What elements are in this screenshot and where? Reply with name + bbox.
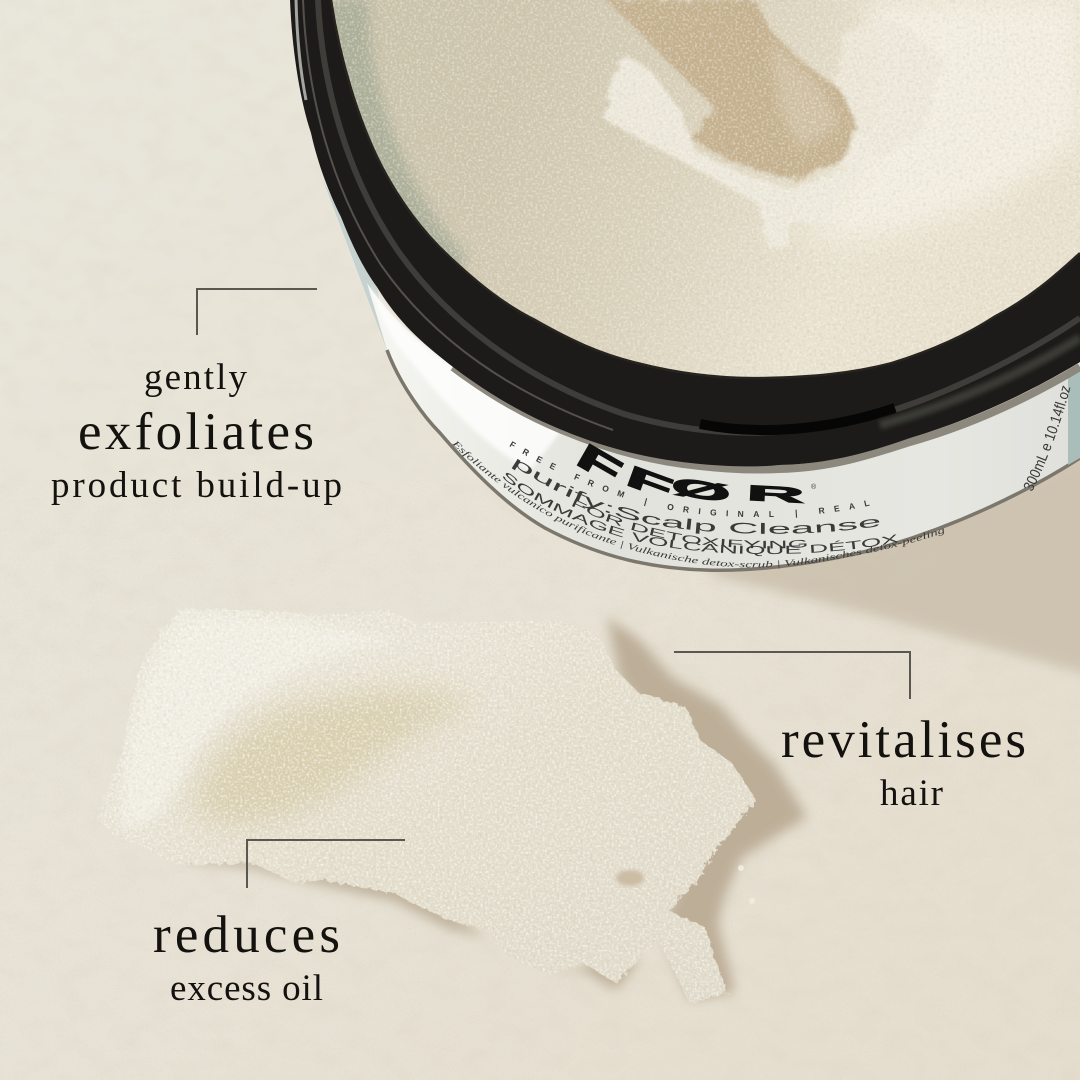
label text bbox=[452, 386, 1070, 569]
inner rim line bbox=[331, 0, 1080, 378]
caption text: reduces bbox=[153, 906, 340, 964]
jar label bbox=[367, 283, 1080, 570]
upper right crystals bbox=[834, 27, 868, 124]
tan crater bbox=[606, 0, 857, 180]
callout: exfoliates bbox=[51, 289, 342, 506]
jar body teal side bbox=[323, 180, 387, 350]
scrub smear bbox=[90, 600, 770, 1010]
descriptor English: FOR DETOXIFYING bbox=[572, 499, 807, 548]
caption text: exfoliates bbox=[78, 403, 314, 461]
jar right teal panel bbox=[1068, 367, 1080, 465]
brand logo: Ø bbox=[669, 471, 733, 509]
crater lighter lobe bbox=[771, 48, 838, 147]
callout: revitalises bbox=[674, 652, 1026, 814]
leader line bbox=[674, 652, 910, 699]
descriptor translations: Esfoliante vulcanico purificante | Vulkanische detox-scrub | Vulkanisches detox-peeling bbox=[452, 440, 944, 569]
left glass tint bbox=[325, 0, 470, 275]
jar bbox=[290, 0, 1080, 572]
callout: reduces bbox=[153, 840, 405, 1009]
smear pale ridge bbox=[122, 624, 368, 827]
product name: purify:Scalp Cleanse bbox=[512, 458, 880, 534]
volume: 300mL e 10.14fl.oz bbox=[1024, 386, 1070, 491]
caption text bbox=[781, 711, 1026, 814]
white crystal ridge bbox=[605, 55, 878, 248]
caption text bbox=[153, 906, 340, 1009]
jar cast shadow bbox=[700, 440, 1080, 678]
brand logo: R bbox=[746, 481, 805, 508]
caption text: revitalises bbox=[781, 711, 1026, 769]
smear cast shadow bbox=[178, 617, 807, 1000]
smear body bbox=[97, 610, 756, 1003]
black rim bbox=[290, 0, 1080, 466]
caption text: product build-up bbox=[51, 465, 342, 506]
smear hole bbox=[616, 870, 644, 886]
brand logo: F bbox=[622, 459, 677, 506]
leader line bbox=[197, 289, 317, 335]
rim highlights bbox=[296, 0, 1080, 433]
descriptor French: SOMMAGE VOLCANIQUE DÉTOX bbox=[503, 472, 898, 556]
smear warm hollow bbox=[190, 689, 480, 825]
leader line bbox=[247, 840, 405, 888]
brand logo: F bbox=[570, 436, 628, 492]
product scrub inside jar bbox=[320, 0, 1080, 390]
bright zone right bbox=[800, 0, 1080, 238]
jar lower edge bbox=[387, 350, 1080, 570]
caption text bbox=[51, 357, 342, 506]
caption text: excess oil bbox=[170, 968, 323, 1009]
jar label white highlight bbox=[370, 285, 562, 470]
smear crystals bbox=[90, 600, 770, 1010]
tagline: FREE FROM | ORIGINAL | REAL bbox=[510, 441, 870, 518]
crumbs bbox=[738, 865, 755, 904]
scrub crystals bbox=[604, 0, 1080, 376]
brand logo: ® bbox=[811, 483, 817, 491]
caption text: hair bbox=[880, 773, 943, 814]
caption text: gently bbox=[144, 357, 248, 398]
silver band bbox=[453, 367, 1080, 470]
brand logo bbox=[570, 436, 817, 509]
